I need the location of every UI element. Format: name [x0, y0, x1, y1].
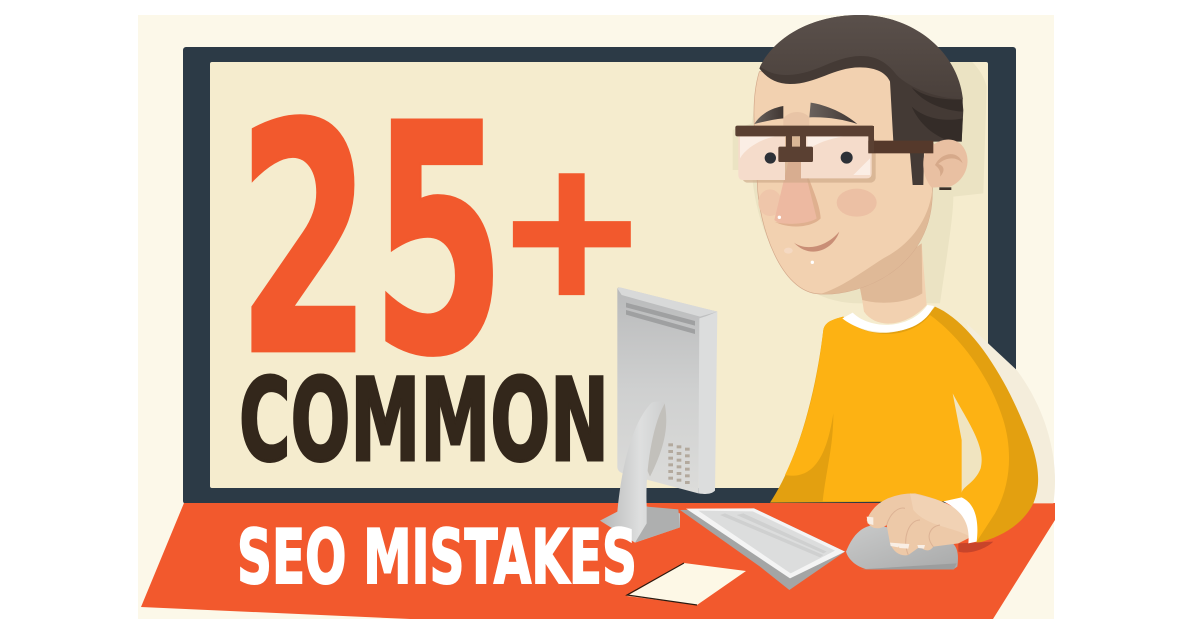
keyboard	[680, 508, 845, 590]
cheek	[837, 189, 877, 217]
cuff	[943, 497, 977, 543]
eyebrows	[783, 112, 809, 126]
heading: 25: 25	[237, 56, 506, 426]
person at desk	[733, 15, 1055, 543]
monitor stand	[640, 403, 666, 477]
glasses	[735, 126, 933, 183]
person shadow on wall	[733, 40, 987, 303]
infographic illustration	[138, 15, 1055, 619]
heading: SEO MISTAKES: SEO MISTAKES	[237, 513, 637, 601]
heading: plus sign: +	[503, 98, 640, 366]
nose	[774, 162, 820, 226]
collar	[842, 305, 934, 332]
sweater	[770, 307, 1055, 543]
heading: COMMON: COMMON	[239, 354, 609, 487]
mouse and hand	[846, 493, 993, 569]
arm gap	[953, 393, 982, 493]
monitor back	[617, 288, 717, 493]
hand shadow	[958, 542, 993, 553]
panel: cream background	[138, 15, 1054, 619]
ear	[923, 140, 968, 188]
vent holes	[668, 443, 690, 484]
panel: orange desk	[141, 503, 1055, 619]
paper note	[627, 563, 746, 605]
paper shadow	[627, 563, 697, 605]
mouse	[846, 525, 958, 569]
hand	[867, 493, 972, 555]
monitor side	[698, 308, 717, 494]
mouth	[794, 232, 839, 252]
hair	[759, 15, 963, 185]
panel: wall screen frame	[183, 47, 1016, 504]
computer monitor	[600, 287, 717, 543]
face	[754, 60, 933, 294]
head	[735, 15, 968, 294]
neck	[842, 243, 934, 332]
